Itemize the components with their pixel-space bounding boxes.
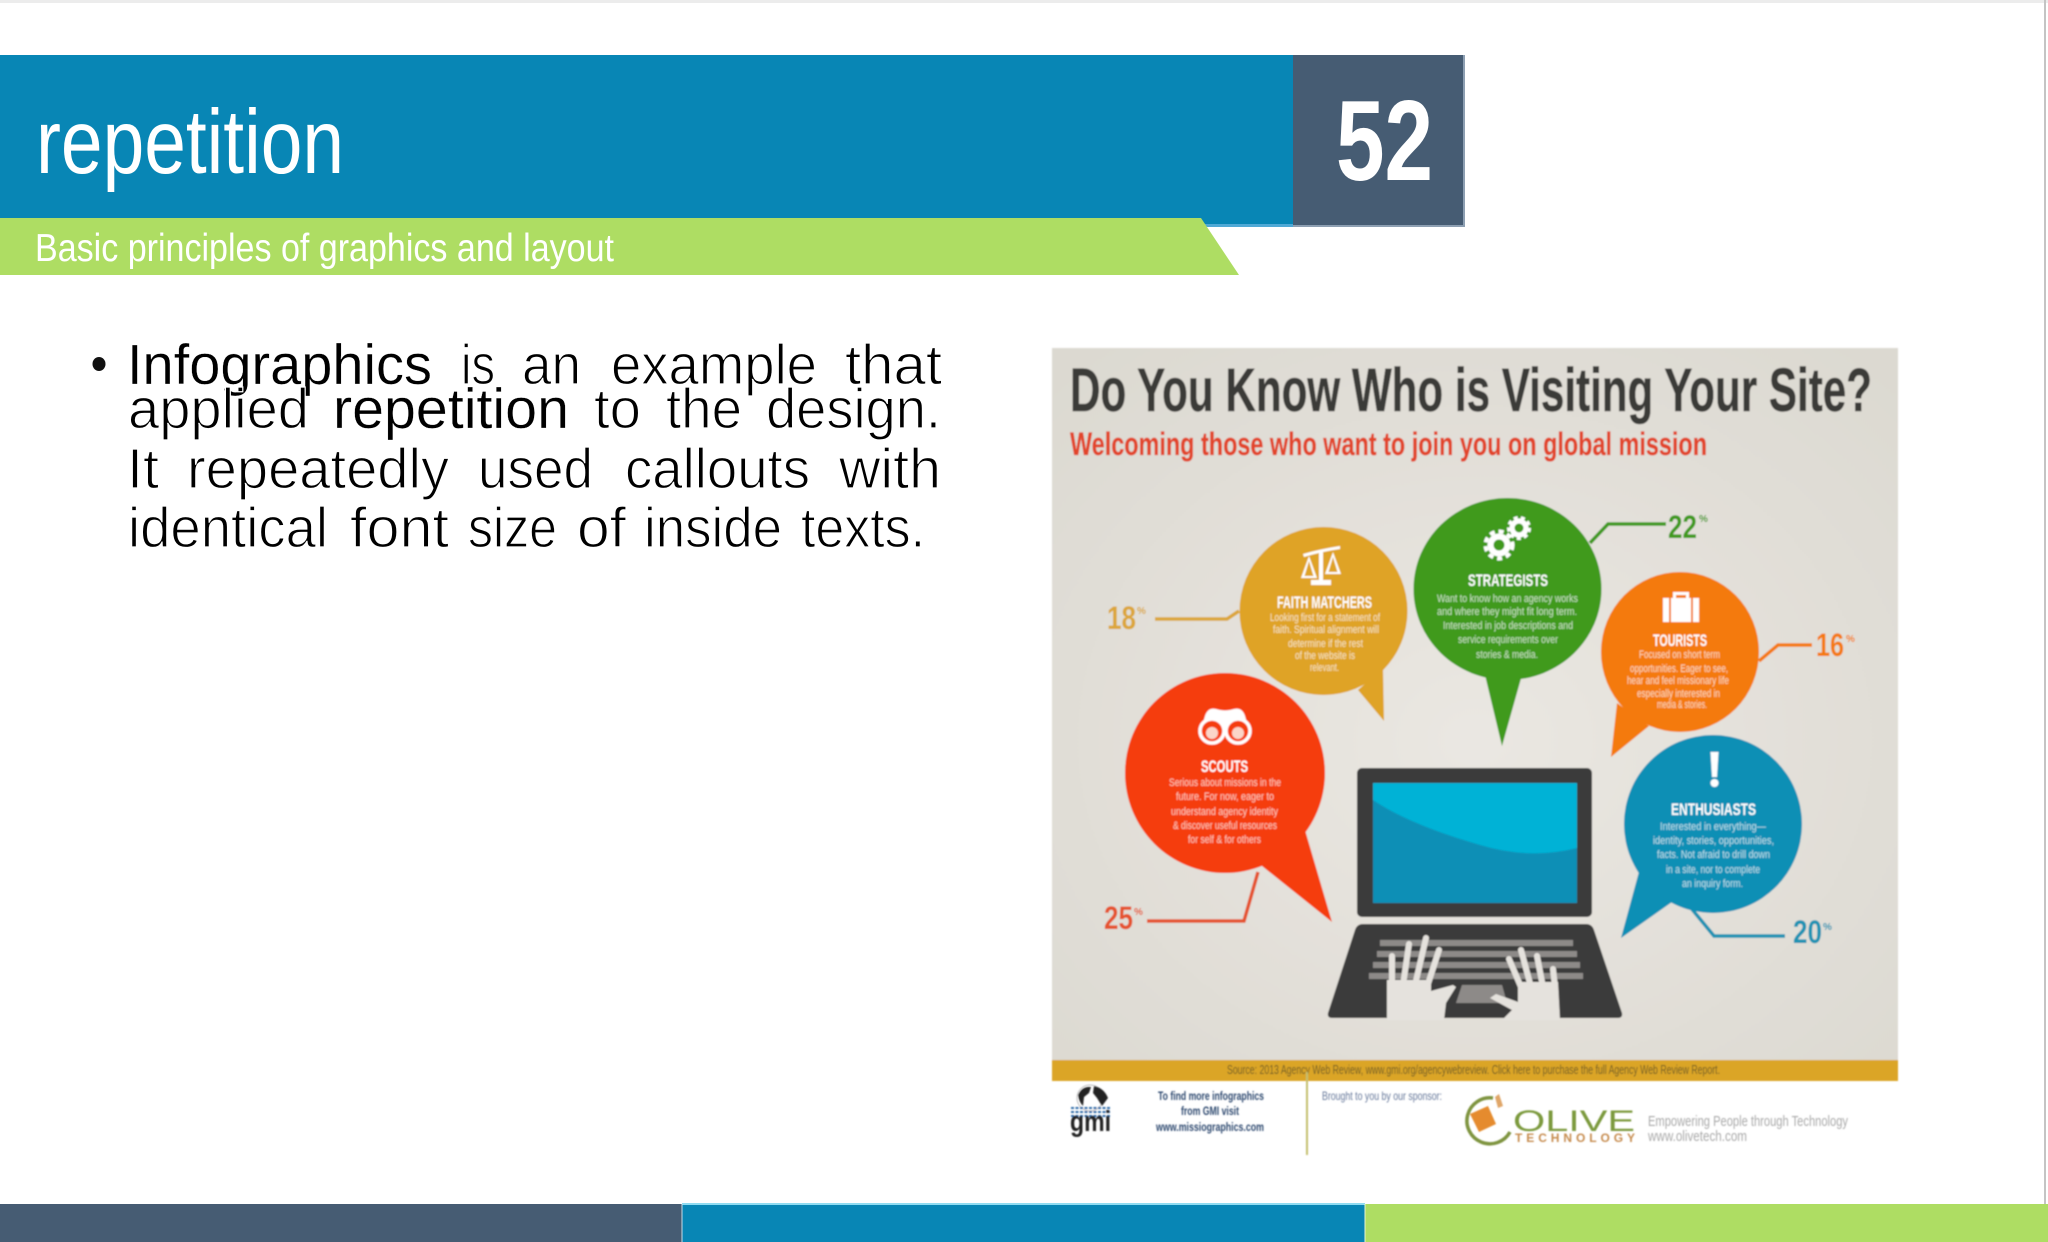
strategists description: Want to know how an agency works bbox=[1437, 593, 1578, 605]
25% connector: 25 bbox=[1104, 900, 1133, 936]
callout: faith matchers bbox=[1240, 527, 1408, 721]
line 3 bbox=[127, 437, 941, 501]
line 3: repeatedly bbox=[187, 437, 449, 501]
icon: binoculars bbox=[1200, 709, 1250, 743]
strategists description bbox=[1437, 593, 1578, 661]
line 4: identical bbox=[128, 496, 328, 560]
icon: suitcase bbox=[1663, 592, 1699, 622]
line 2 bbox=[128, 377, 941, 441]
header band bbox=[0, 55, 1465, 227]
line 2: applied bbox=[128, 377, 309, 441]
laptop screen bbox=[1357, 768, 1592, 917]
line 4: size bbox=[468, 496, 557, 560]
icon: scales bbox=[1301, 546, 1341, 585]
line 2: to bbox=[594, 377, 641, 441]
icon: laptop bbox=[1328, 768, 1622, 1020]
scouts description: for self & for others bbox=[1188, 834, 1261, 846]
gmi note bbox=[1155, 1089, 1264, 1134]
line 1: Infographics bbox=[127, 333, 432, 397]
bullet text block bbox=[92, 333, 942, 560]
20% connector: 20 bbox=[1793, 914, 1822, 950]
faith matchers description: of the website is bbox=[1295, 650, 1355, 662]
enthusiasts description: an inquiry form. bbox=[1682, 878, 1743, 890]
line 2: design. bbox=[766, 377, 941, 441]
strategists description: Interested in job descriptions and bbox=[1443, 620, 1573, 632]
logo: olive technology: OLIVE bbox=[1513, 1105, 1635, 1138]
line 1: an bbox=[522, 333, 581, 397]
left hand bbox=[1387, 938, 1456, 1020]
callout: enthusiasts: ENTHUSIASTS bbox=[1671, 800, 1756, 819]
sponsor tagline: Empowering People through Technology bbox=[1648, 1113, 1848, 1130]
icon: gears bbox=[1486, 518, 1530, 558]
line 4 bbox=[128, 496, 925, 560]
subtitle ribbon bbox=[0, 218, 1239, 275]
callout: scouts bbox=[1125, 673, 1332, 922]
18% connector: % bbox=[1137, 606, 1146, 617]
line 2: the bbox=[666, 377, 742, 441]
scouts description: understand agency identity bbox=[1171, 806, 1278, 818]
sponsor label: Brought to you by our sponsor: bbox=[1322, 1089, 1442, 1103]
22% connector: 22 bbox=[1668, 509, 1697, 545]
line 2: repetition bbox=[333, 377, 569, 441]
callout: scouts: SCOUTS bbox=[1201, 757, 1248, 776]
source band bbox=[1052, 1060, 1898, 1081]
strategists description: and where they might fit long term. bbox=[1437, 606, 1577, 618]
faith matchers description: determine if the rest bbox=[1288, 638, 1363, 650]
18% connector bbox=[1107, 600, 1239, 636]
callout: faith matchers: FAITH MATCHERS bbox=[1277, 593, 1372, 612]
line 4: texts. bbox=[801, 496, 925, 560]
infographic background bbox=[1052, 348, 1898, 1060]
20% connector bbox=[1691, 908, 1832, 950]
bullet dot bbox=[92, 357, 106, 371]
enthusiasts description bbox=[1653, 821, 1774, 890]
infographic image bbox=[1052, 348, 1898, 1155]
infographic subheading: Welcoming those who want to join you on global mission bbox=[1070, 426, 1707, 462]
line 3: with bbox=[838, 437, 941, 501]
16% connector: % bbox=[1846, 634, 1855, 645]
page number box: 52 bbox=[1336, 78, 1433, 205]
olive mark bbox=[1467, 1094, 1510, 1144]
title: repetition bbox=[36, 92, 344, 193]
tourists description: hear and feel missionary life bbox=[1627, 675, 1729, 687]
tourists description: media & stories. bbox=[1657, 699, 1707, 711]
strategists description: stories & media. bbox=[1476, 649, 1538, 661]
faith matchers description: Looking first for a statement of bbox=[1270, 612, 1381, 624]
line 4: font bbox=[350, 496, 449, 560]
logo: gmi: gmi bbox=[1070, 1106, 1111, 1138]
20% connector: % bbox=[1823, 922, 1832, 933]
strategists description: service requirements over bbox=[1458, 634, 1558, 646]
sponsor tagline: www.olivetech.com bbox=[1647, 1128, 1747, 1145]
25% connector: % bbox=[1134, 907, 1143, 918]
callout: tourists: TOURISTS bbox=[1653, 631, 1707, 650]
16% connector: 16 bbox=[1816, 627, 1844, 663]
faith matchers description bbox=[1270, 612, 1381, 674]
line 1 bbox=[127, 333, 942, 397]
icon: exclamation mark bbox=[1710, 752, 1718, 787]
enthusiasts description: in a site, nor to complete bbox=[1666, 864, 1760, 876]
gmi note: from GMI visit bbox=[1181, 1104, 1239, 1118]
line 4: of bbox=[577, 496, 626, 560]
line 3: It bbox=[127, 437, 159, 501]
line 3: callouts bbox=[625, 437, 810, 501]
scouts description: & discover useful resources bbox=[1173, 820, 1277, 832]
enthusiasts description: Interested in everything— bbox=[1660, 821, 1766, 833]
footer colour bars bbox=[0, 1203, 2048, 1242]
line 1: example bbox=[611, 333, 817, 397]
subtitle ribbon: Basic principles of graphics and layout bbox=[35, 227, 614, 270]
callout: strategists: STRATEGISTS bbox=[1468, 571, 1548, 590]
laptop keyboard base bbox=[1328, 924, 1622, 1018]
right hand bbox=[1490, 950, 1560, 1020]
25% connector bbox=[1104, 872, 1258, 936]
source band: Source: 2013 Agency Web Review, www.gmi.org/agencywebreview. Click here to purchase the full Agency Web Review Report. bbox=[1227, 1062, 1720, 1077]
tourists description: Focused on short term bbox=[1639, 649, 1720, 661]
line 1: that bbox=[845, 333, 942, 397]
gmi note: www.missiographics.com bbox=[1155, 1120, 1264, 1134]
tourists description: especially interested in bbox=[1637, 688, 1720, 700]
logo: gmi bbox=[1070, 1085, 1111, 1138]
line 4: inside bbox=[644, 496, 782, 560]
tourists description: opportunities. Eager to see, bbox=[1630, 663, 1728, 675]
22% connector: % bbox=[1699, 514, 1708, 525]
tourists description bbox=[1627, 649, 1729, 711]
enthusiasts description: facts. Not afraid to drill down bbox=[1657, 849, 1770, 861]
callout: tourists bbox=[1601, 572, 1759, 757]
gmi note: To find more infographics bbox=[1158, 1089, 1264, 1103]
logo: olive technology bbox=[1467, 1094, 1635, 1145]
scouts description: future. For now, eager to bbox=[1176, 791, 1274, 803]
callout: strategists bbox=[1414, 498, 1602, 746]
enthusiasts description: identity, stories, opportunities, bbox=[1653, 835, 1774, 847]
line 1: is bbox=[461, 333, 495, 397]
16% connector bbox=[1759, 627, 1855, 663]
sponsor tagline bbox=[1647, 1113, 1848, 1145]
22% connector bbox=[1590, 509, 1708, 545]
scouts description bbox=[1169, 777, 1281, 846]
logo: olive technology: TECHNOLOGY bbox=[1515, 1131, 1635, 1145]
page number box bbox=[1293, 55, 1465, 227]
faith matchers description: faith. Spiritual alignment will bbox=[1273, 624, 1379, 636]
18% connector: 18 bbox=[1107, 600, 1136, 636]
scouts description: Serious about missions in the bbox=[1169, 777, 1281, 789]
faith matchers description: relevant. bbox=[1310, 662, 1339, 674]
line 3: used bbox=[478, 437, 593, 501]
callout: enthusiasts bbox=[1621, 735, 1802, 938]
